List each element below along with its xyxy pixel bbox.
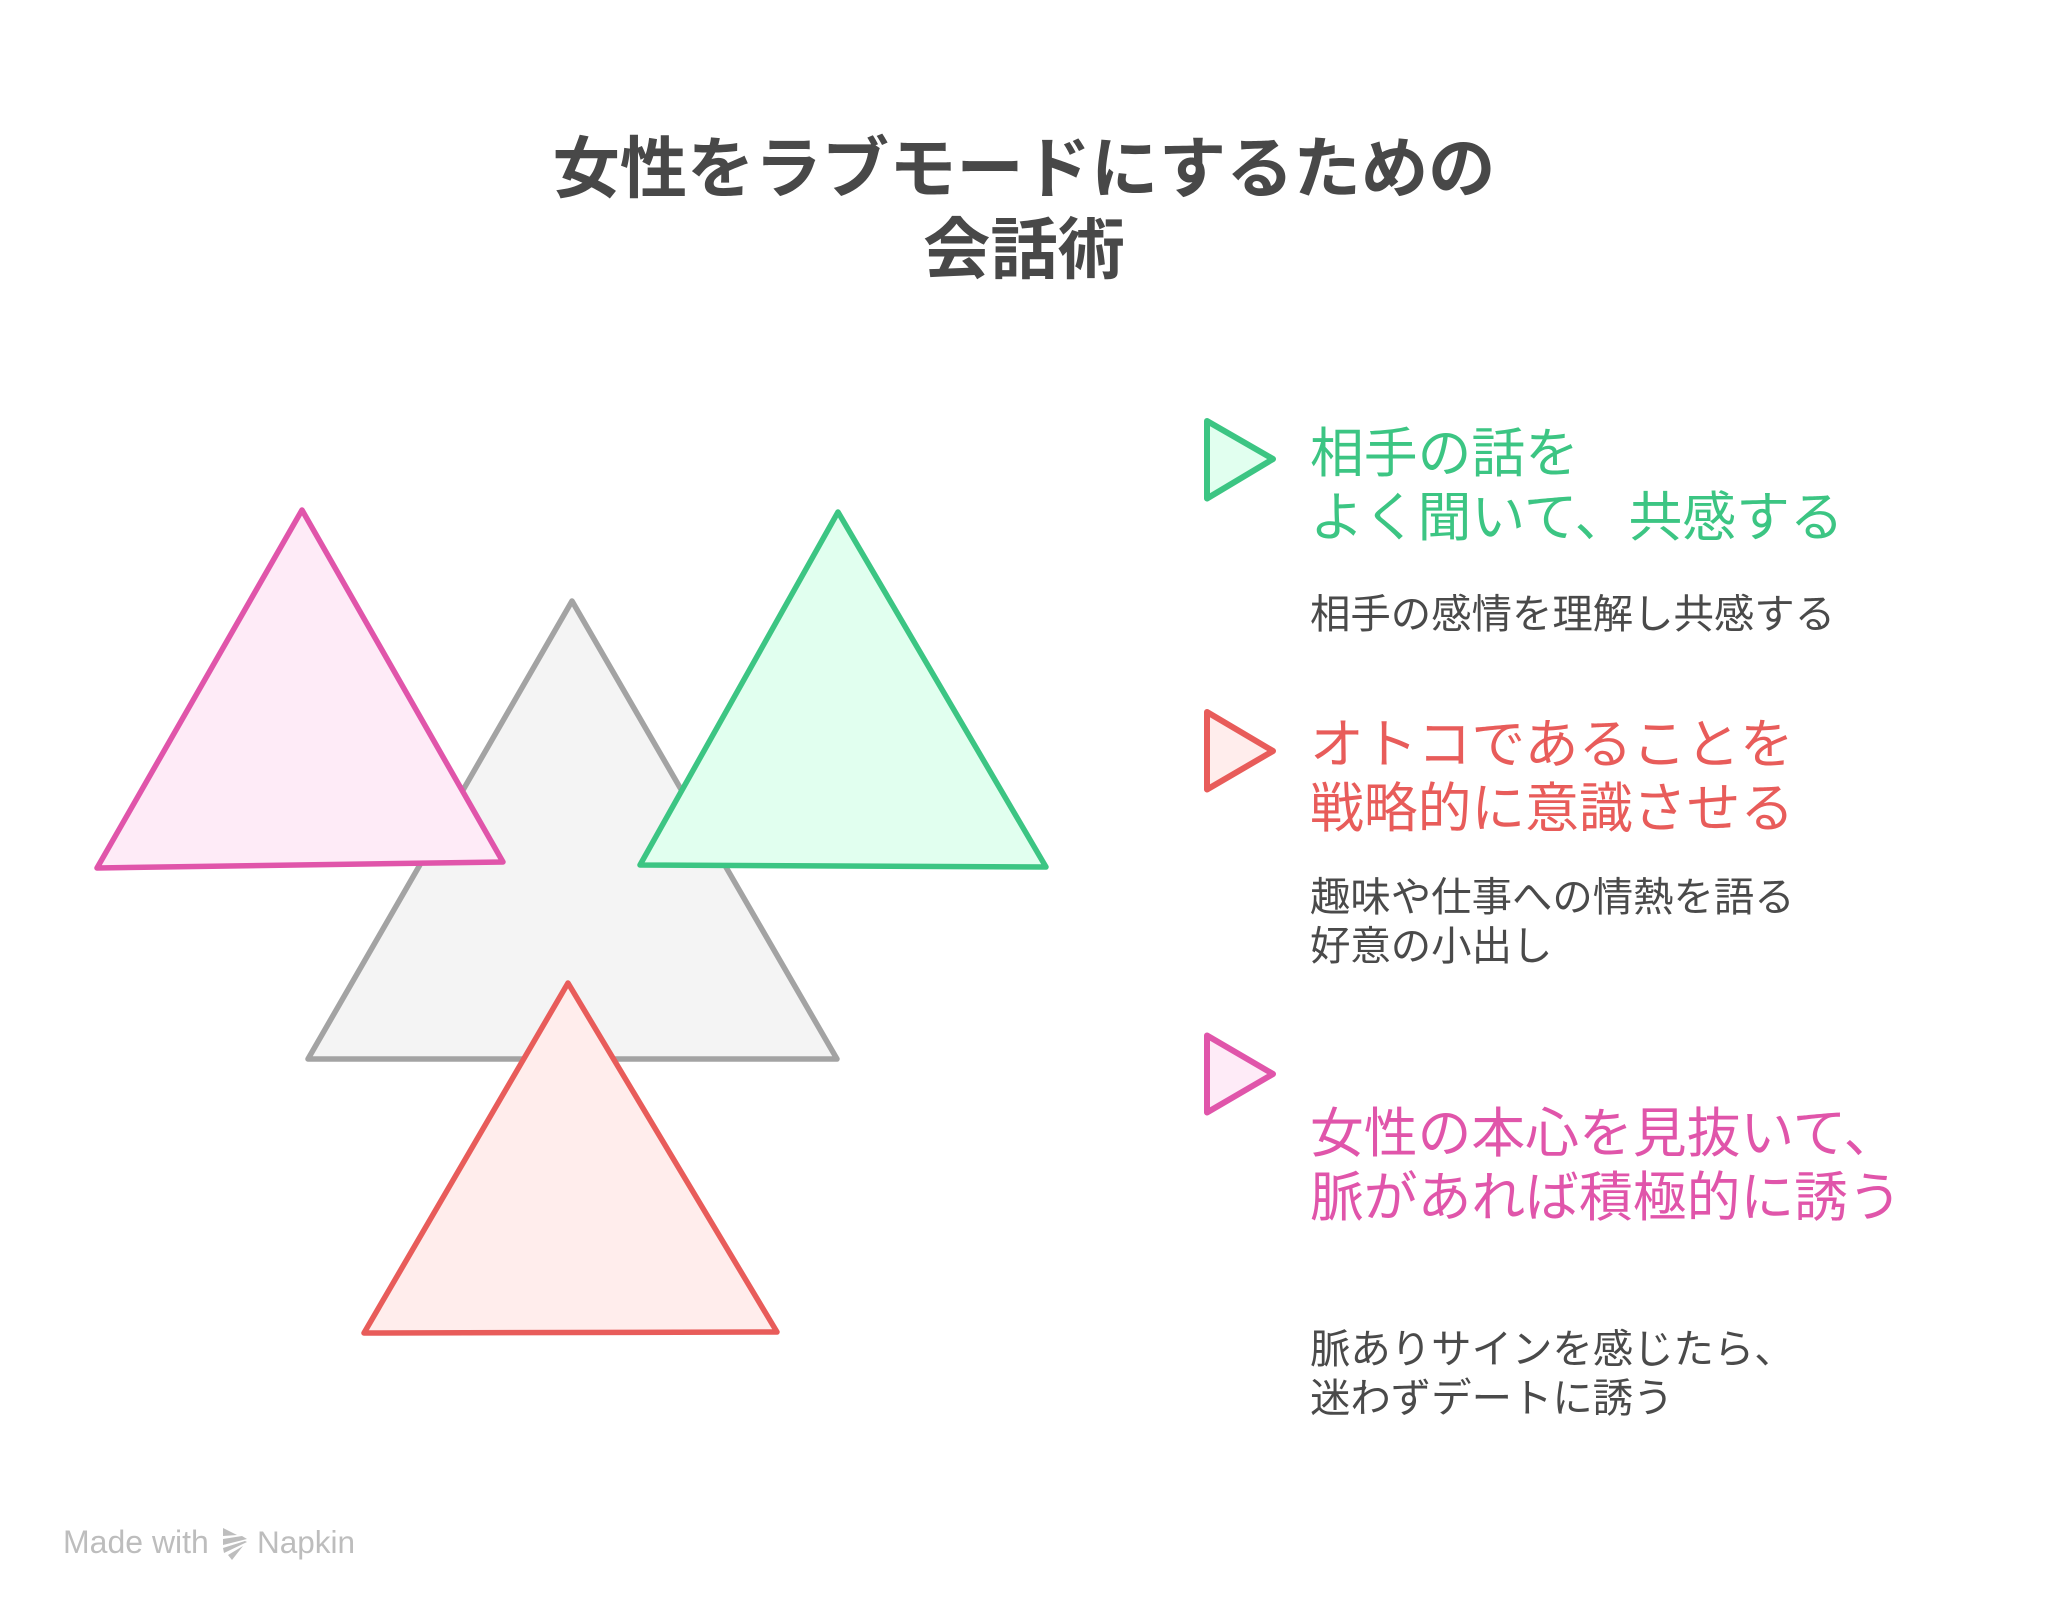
- footer: made with napkin: Napkin: [257, 1524, 355, 1560]
- footer: made with napkin: [63, 1524, 355, 1560]
- green triangle: [640, 512, 1046, 867]
- heading: be seen as a man: [1310, 715, 1794, 839]
- heading: read her true feelings: 女性の本心を見抜いて、: [1310, 1104, 1897, 1164]
- heading: be seen as a man: 戦略的に意識させる: [1310, 779, 1794, 839]
- heading: read her true feelings: [1310, 1104, 1902, 1228]
- red triangle: [364, 983, 777, 1333]
- text: invite detail: 脈ありサインを感じたら、: [1310, 1326, 1795, 1372]
- footer: made with napkin: Made with: [63, 1524, 209, 1560]
- icon: pink marker: [1207, 1036, 1273, 1112]
- icon: red marker: [1207, 712, 1273, 790]
- heading: listen and empathize: よく聞いて、共感する: [1310, 488, 1844, 548]
- gray triangle: [308, 601, 837, 1059]
- heading: be seen as a man: オトコであることを: [1310, 715, 1794, 775]
- text: man detail: 趣味や仕事への情熱を語る: [1310, 874, 1795, 920]
- title: [553, 132, 1495, 288]
- pink triangle: [97, 510, 503, 868]
- heading: read her true feelings: 脈があれば積極的に誘う: [1310, 1168, 1902, 1228]
- text: man detail: [1310, 874, 1795, 969]
- text: man detail: 好意の小出し: [1310, 923, 1552, 969]
- icon: green marker: [1207, 421, 1273, 498]
- title: 会話術: [923, 213, 1125, 288]
- text: invite detail: [1310, 1326, 1795, 1421]
- title: 女性をラブモードにするための: [553, 132, 1495, 207]
- icon: napkin logo: [223, 1528, 247, 1560]
- text: invite detail: 迷わずデートに誘う: [1310, 1375, 1674, 1421]
- heading: listen and empathize: 相手の話を: [1310, 424, 1579, 484]
- text: listen detail: 相手の感情を理解し共感する: [1310, 591, 1835, 637]
- heading: listen and empathize: [1310, 424, 1844, 548]
